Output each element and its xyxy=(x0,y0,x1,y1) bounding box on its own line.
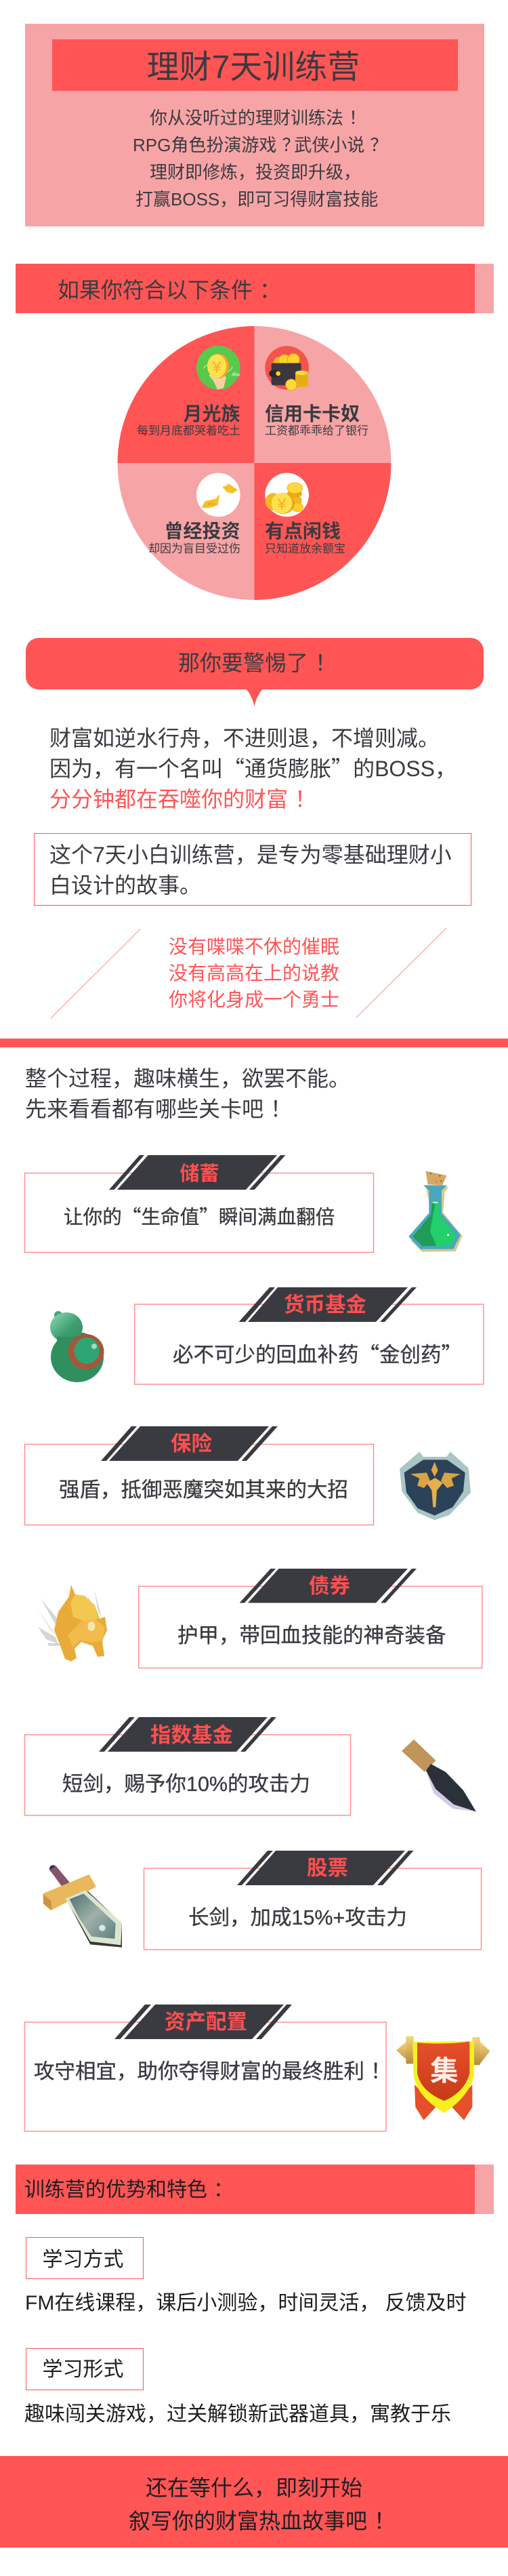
feature: learning method xyxy=(25,2237,467,2314)
tag: insurance xyxy=(101,1426,278,1461)
section banner: conditions: 如果你符合以下条件 ： xyxy=(58,278,281,302)
stage card: insurance: 强盾，抵御恶魔突如其来的大招 xyxy=(59,1478,348,1502)
intro text: 你从没听过的理财训练法 ！ xyxy=(150,108,366,128)
feature: learning format xyxy=(24,2348,451,2426)
icon: green gourd xyxy=(50,1311,104,1382)
icon: wallet with coins xyxy=(265,346,309,390)
tag: index fund xyxy=(99,1717,276,1752)
icon: flying banknotes xyxy=(196,473,240,517)
label box: learning method: 学习方式 xyxy=(42,2249,123,2271)
footer call to action: 还在等什么，即刻开始 xyxy=(146,2476,362,2500)
red slogan with diagonal lines xyxy=(51,928,446,1018)
icon: red banner xyxy=(396,2036,490,2120)
section banner: features: 训练营的优势和特色 ： xyxy=(24,2179,234,2201)
boxed statement xyxy=(34,834,471,906)
label box: learning method xyxy=(26,2237,144,2279)
inflation paragraph: 财富如逆水行舟，不进则退，不增则减。 xyxy=(49,726,440,750)
tag: money fund: 货币基金 xyxy=(284,1293,366,1316)
inflation paragraph: 分分钟都在吞噬你的财富 ！ xyxy=(49,787,316,811)
boxed statement: 这个7天小白训练营，是专为零基础理财小 xyxy=(49,843,452,867)
tag: stocks: 股票 xyxy=(307,1857,348,1880)
intro text xyxy=(133,108,387,209)
icon: coin in hand: ¥ xyxy=(211,358,221,376)
intro text: 理财即修炼，投资即升级， xyxy=(150,162,361,182)
stage card: asset allocation xyxy=(24,2005,391,2131)
boxed statement: 白设计的故事。 xyxy=(49,873,201,898)
section banner: conditions xyxy=(16,264,494,313)
red slogan with diagonal lines: 没有高高在上的说教 xyxy=(169,963,339,984)
label: moonlight clan xyxy=(137,403,240,437)
label box: learning format: 学习形式 xyxy=(42,2358,123,2381)
label: credit card slave xyxy=(265,403,368,437)
label: invested before xyxy=(148,521,240,555)
tag: asset allocation xyxy=(114,2005,292,2039)
intro text: RPG角色扮演游戏 ？武侠小说 ？ xyxy=(133,135,387,155)
stage card: asset allocation: 攻守相宜，助你夺得财富的最终胜利 ！ xyxy=(34,2060,391,2083)
icon: green potion xyxy=(408,1171,463,1252)
hero panel xyxy=(25,24,484,226)
tag: bonds xyxy=(240,1569,417,1603)
icon: pile of gold coins xyxy=(265,473,309,517)
stage card: savings: 让你的“生命值”瞬间满血翻倍 xyxy=(64,1202,335,1230)
tag: savings xyxy=(109,1155,286,1190)
red slogan with diagonal lines: 没有喋喋不休的催眠 xyxy=(169,936,339,957)
stages intro text xyxy=(25,1066,350,1121)
footer call to action xyxy=(0,2456,508,2548)
red slogan with diagonal lines: 你将化身成一个勇士 xyxy=(169,989,339,1010)
stage card: money fund: 必不可少的回血补药“金创药” xyxy=(173,1338,462,1368)
stage card: savings xyxy=(24,1155,374,1253)
stage card: stocks: 长剑，加成15%+攻击力 xyxy=(188,1906,407,1929)
tag: savings: 储蓄 xyxy=(179,1163,219,1185)
title bar xyxy=(52,39,458,91)
warning speech bubble xyxy=(26,638,484,706)
footer call to action: 叙写你的财富热血故事吧 ！ xyxy=(129,2509,396,2533)
label box: learning format xyxy=(26,2348,144,2390)
label: moonlight clan: 月光族 xyxy=(183,403,240,424)
icon: short knife xyxy=(402,1739,476,1811)
icon: flying banknotes: ¥50 xyxy=(208,502,215,506)
stage card: index fund xyxy=(24,1717,351,1815)
label: some idle money: 有点闲钱 xyxy=(265,521,341,542)
stage card: money fund xyxy=(135,1287,484,1384)
stage card: bonds xyxy=(139,1569,482,1668)
tag: bonds: 债券 xyxy=(309,1575,350,1598)
label: invested before: 却因为盲目受过伤 xyxy=(148,542,240,555)
icon: long sword xyxy=(43,1865,122,1948)
tag: asset allocation: 资产配置 xyxy=(165,2011,247,2034)
warning speech bubble: 那你要警惕了 ！ xyxy=(178,651,337,675)
label: some idle money: 只知道放余额宝 xyxy=(265,542,345,555)
icon: coin in hand xyxy=(196,346,240,390)
section banner: features xyxy=(16,2165,494,2214)
icon: red banner: 集 xyxy=(430,2055,459,2087)
tag: stocks xyxy=(237,1851,413,1885)
label: invested before: 曾经投资 xyxy=(164,521,240,542)
title bar: 理财7天训练营 xyxy=(147,49,360,85)
intro text: 打赢BOSS，即可习得财富技能 xyxy=(135,189,378,209)
label: moonlight clan: 每到月底都哭着吃土 xyxy=(137,424,240,437)
icon: pile of gold coins: ¥ xyxy=(276,496,287,514)
stages intro text: 整个过程，趣味横生，欲罢不能。 xyxy=(25,1066,350,1091)
label: credit card slave: 工资都乖乖给了银行 xyxy=(265,424,368,437)
feature: learning method: FM在线课程，课后小测验，时间灵活， 反馈及时 xyxy=(25,2292,467,2314)
tag: money fund xyxy=(239,1287,417,1322)
tag: insurance: 保险 xyxy=(171,1432,212,1455)
feature: learning format: 趣味闯关游戏，过关解锁新武器道具，寓教于乐 xyxy=(24,2403,451,2426)
inflation paragraph xyxy=(49,726,457,811)
stage card: index fund: 短剑，赐予你10%的攻击力 xyxy=(62,1773,310,1796)
label: credit card slave: 信用卡卡奴 xyxy=(265,403,360,424)
stage card: insurance xyxy=(24,1426,374,1525)
label: some idle money xyxy=(265,521,345,555)
stage card: bonds: 护甲，带回血技能的神奇装备 xyxy=(177,1624,446,1647)
tag: index fund: 指数基金 xyxy=(150,1724,233,1747)
icon: shield xyxy=(400,1452,471,1520)
stage card: stocks xyxy=(144,1851,481,1950)
quadrant circle chart xyxy=(118,326,391,600)
stages intro text: 先来看看都有哪些关卡吧 ！ xyxy=(25,1097,292,1121)
icon: winged helmet xyxy=(36,1585,107,1662)
inflation paragraph: 因为，有一个名叫“通货膨胀”的BOSS， xyxy=(49,752,457,783)
